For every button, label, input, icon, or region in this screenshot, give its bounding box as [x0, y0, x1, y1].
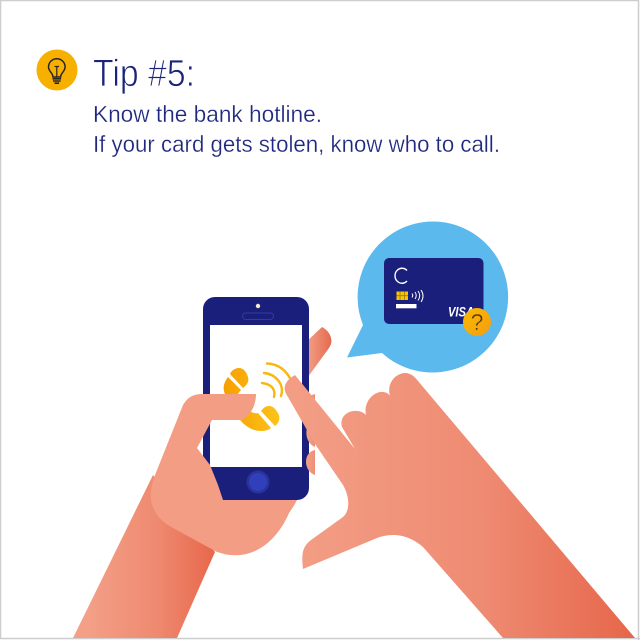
question badge [463, 308, 491, 336]
icon: light bulb badge [36, 50, 78, 90]
body text: If your card gets stolen, know who to call. [93, 131, 500, 157]
home button [246, 470, 270, 494]
bubble [347, 221, 508, 372]
body text: Know the bank hotline. [93, 101, 322, 127]
question badge: ? [471, 309, 483, 335]
lower fingers over phone edge [306, 394, 315, 475]
icon: telephone handset [224, 368, 279, 431]
top finger behind phone [305, 327, 331, 381]
credit card: VISA [448, 304, 474, 320]
body text [93, 101, 500, 157]
credit card [384, 258, 484, 324]
screen [210, 325, 302, 467]
speech bubble with card [347, 221, 508, 372]
title: Tip #5: [93, 53, 195, 95]
sound waves [262, 364, 291, 397]
right hand pointing [285, 373, 635, 638]
left arm [73, 475, 215, 638]
left hand holding phone [151, 394, 297, 555]
phone [203, 297, 309, 500]
